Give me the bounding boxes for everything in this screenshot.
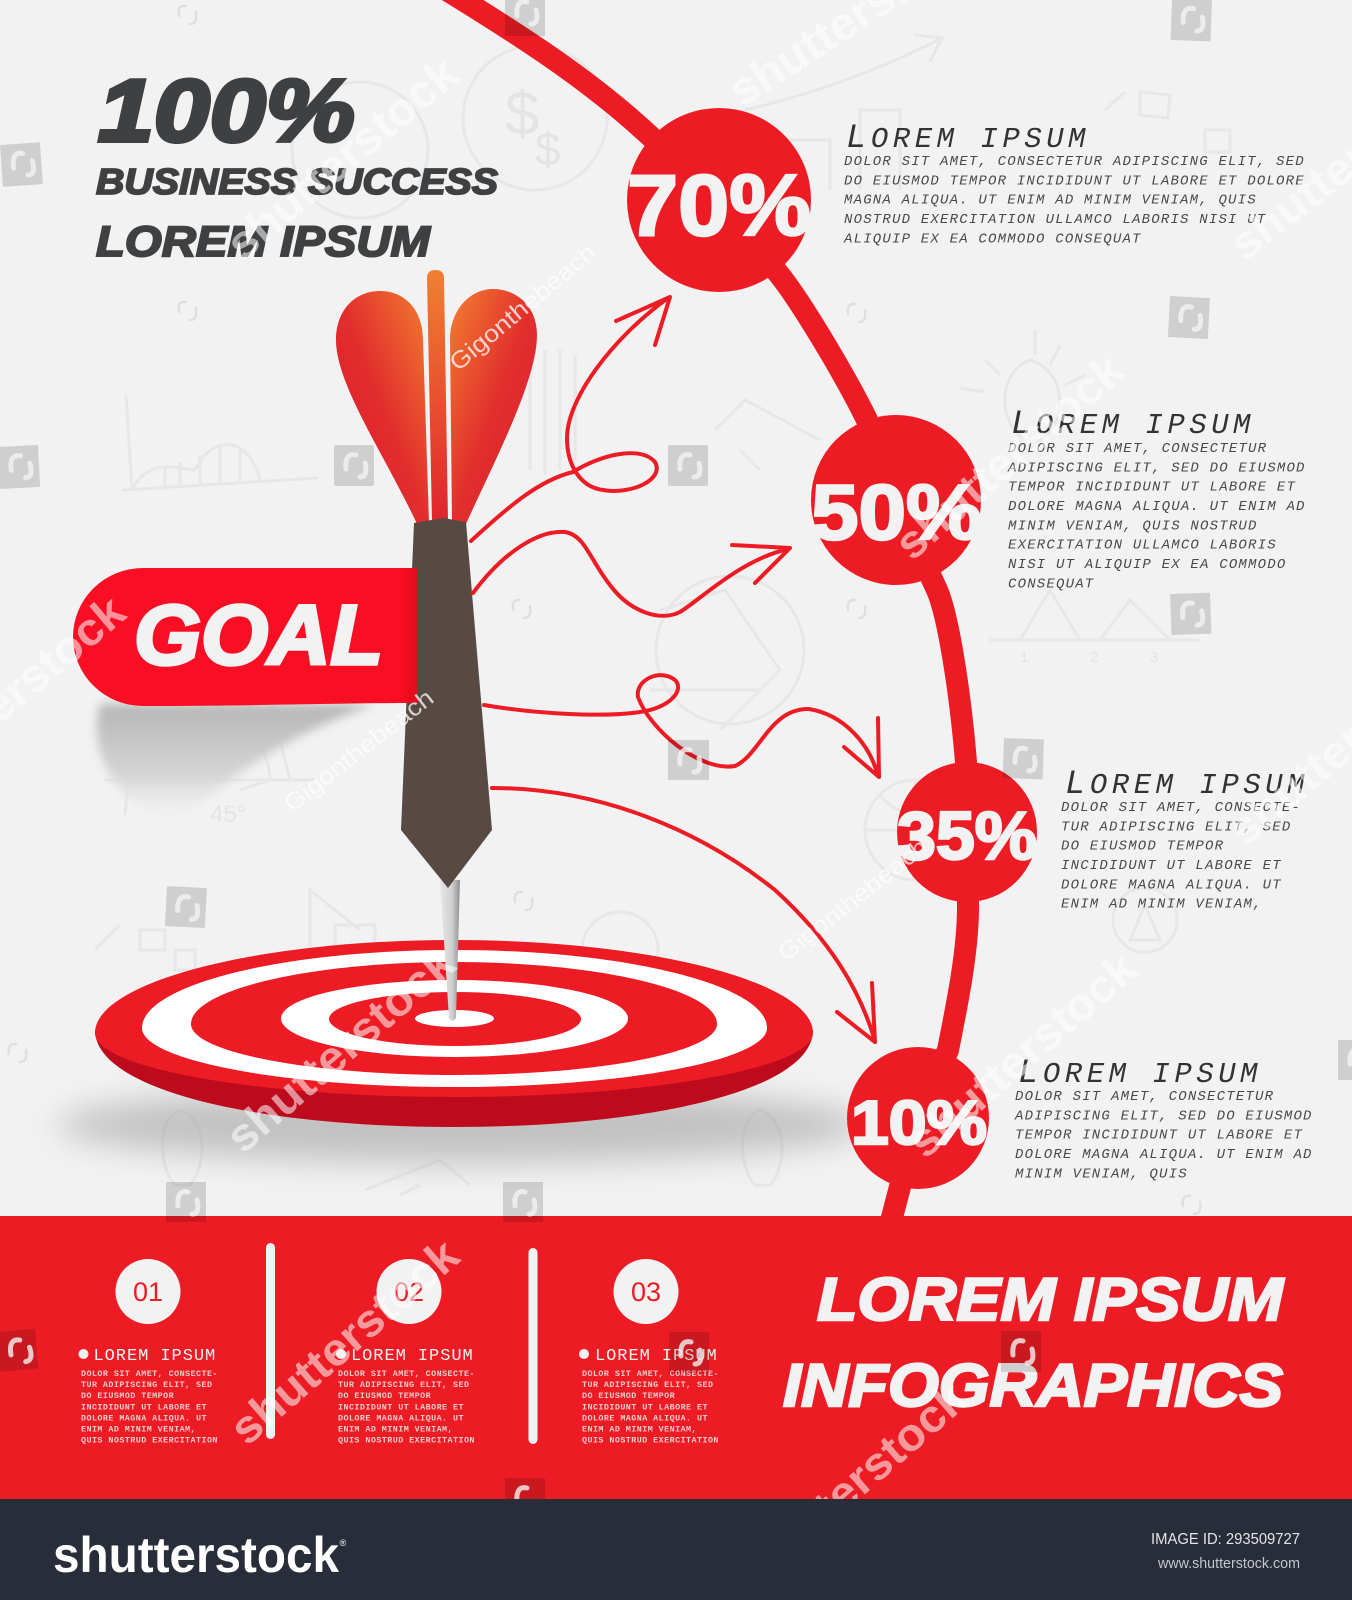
text block 10% <box>1014 1055 1322 1182</box>
column 01: DO EIUSMOD TEMPOR <box>81 1391 175 1401</box>
text block 50%: NISI UT ALIQUIP EX EA COMMODO <box>1008 557 1286 573</box>
text block 10%: DOLORE MAGNA ALIQUA. UT ENIM AD <box>1015 1147 1313 1163</box>
text block 10%: MINIM VENIAM, QUIS <box>1015 1166 1188 1182</box>
column 02: LOREM IPSUM <box>351 1347 474 1366</box>
column 02: QUIS NOSTRUD EXERCITATION <box>338 1436 475 1446</box>
band heading <box>783 1266 1285 1419</box>
bottom band <box>0 1216 1352 1499</box>
band heading: INFOGRAPHICS <box>783 1352 1283 1419</box>
text block 10%: ADIPISCING ELIT, SED DO EIUSMOD <box>1014 1108 1313 1124</box>
dart needle <box>440 880 460 1020</box>
text block 35%: DOLORE MAGNA ALIQUA. UT <box>1061 877 1282 893</box>
watermarks: shutterstock <box>216 46 468 270</box>
text block 70%: LOREM IPSUM <box>846 120 1090 158</box>
text block 35% <box>1061 766 1311 913</box>
title: LOREM IPSUM <box>96 218 431 266</box>
text block 35%: DO EIUSMOD TEMPOR <box>1061 839 1224 855</box>
text block 70% <box>843 120 1314 247</box>
divider 1 <box>266 1243 275 1439</box>
column 01: DOLORE MAGNA ALIQUA. UT <box>81 1413 207 1423</box>
text block 35%: INCIDIDUNT UT LABORE ET <box>1061 858 1282 874</box>
title: 100% <box>98 61 355 160</box>
footer: www.shutterstock.com <box>1157 1555 1300 1572</box>
text block 50%: DOLOR SIT AMET, CONSECTETUR <box>1008 441 1267 457</box>
column 01: QUIS NOSTRUD EXERCITATION <box>81 1436 218 1446</box>
text block 35%: DOLOR SIT AMET, CONSECTE- <box>1061 800 1301 816</box>
column 03: ENIM AD MINIM VENIAM, <box>582 1424 697 1434</box>
column 03: DOLORE MAGNA ALIQUA. UT <box>582 1413 708 1423</box>
column 01: TUR ADIPISCING ELIT, SED <box>81 1380 212 1390</box>
text block 10%: LOREM IPSUM <box>1018 1055 1262 1093</box>
text block 35%: TUR ADIPISCING ELIT, SED <box>1061 819 1291 835</box>
doodle symbols <box>210 80 1158 828</box>
text block 50%: CONSEQUAT <box>1008 576 1094 592</box>
doodle symbols: $ <box>505 80 539 149</box>
title <box>96 61 498 266</box>
column 01: ENIM AD MINIM VENIAM, <box>81 1424 196 1434</box>
background sketch doodles <box>95 35 1230 1195</box>
band heading: LOREM IPSUM <box>817 1266 1285 1333</box>
column 02: 02 <box>394 1277 424 1307</box>
watermarks: Gigonthebeach <box>279 684 439 818</box>
text block 50%: EXERCITATION ULLAMCO LABORIS <box>1008 538 1277 554</box>
text block 50%: MINIM VENIAM, QUIS NOSTRUD <box>1008 518 1258 534</box>
step 35% <box>897 762 1037 902</box>
step 35%: 35% <box>897 798 1037 874</box>
column 02: DOLOR SIT AMET, CONSECTE- <box>338 1369 475 1379</box>
text block 70%: DOLOR SIT AMET, CONSECTETUR ADIPISCING ELIT, SED <box>844 154 1305 170</box>
step 10%: 10% <box>851 1089 987 1158</box>
doodle symbols: 2 <box>1090 649 1098 666</box>
column 03: DOLOR SIT AMET, CONSECTE- <box>582 1369 719 1379</box>
column 03: INCIDIDUNT UT LABORE ET <box>582 1402 708 1412</box>
footer image id: IMAGE ID: 293509727 <box>1151 1531 1300 1548</box>
watermarks: shutterstock <box>727 1371 977 1598</box>
doodle symbols: 45° <box>210 801 246 828</box>
arrow to 70% <box>471 297 670 541</box>
doodle symbols: 3 <box>1150 649 1158 666</box>
column 03 <box>579 1259 724 1446</box>
text block 70%: ALIQUIP EX EA COMMODO CONSEQUAT <box>843 231 1142 247</box>
doodle symbols: 1 <box>1020 649 1028 666</box>
timeline curve <box>440 0 968 1225</box>
text block 35%: ENIM AD MINIM VENIAM, <box>1061 897 1263 913</box>
arrow to 10% <box>492 788 875 1042</box>
goal banner shadow <box>97 704 375 825</box>
column 01: 01 <box>133 1277 163 1307</box>
ground shadow <box>57 1087 867 1163</box>
step 50% <box>811 415 982 585</box>
text block 70%: MAGNA ALIQUA. UT ENIM AD MINIM VENIAM, QUIS <box>844 193 1257 209</box>
text block 35%: LOREM IPSUM <box>1065 766 1309 804</box>
text block 50%: ADIPISCING ELIT, SED DO EIUSMOD <box>1007 460 1306 476</box>
column 02: INCIDIDUNT UT LABORE ET <box>338 1402 464 1412</box>
column 03: QUIS NOSTRUD EXERCITATION <box>582 1436 719 1446</box>
column 01: DOLOR SIT AMET, CONSECTE- <box>81 1369 218 1379</box>
dart <box>336 270 537 1020</box>
step 10% <box>847 1047 989 1189</box>
footer: ® <box>340 1538 347 1548</box>
watermarks: shutterstock <box>215 936 465 1163</box>
column 01: INCIDIDUNT UT LABORE ET <box>81 1402 207 1412</box>
column 02: DO EIUSMOD TEMPOR <box>338 1391 432 1401</box>
text block 70%: DO EIUSMOD TEMPOR INCIDIDUNT UT LABORE ET DOLORE <box>844 173 1305 189</box>
column 02: TUR ADIPISCING ELIT, SED <box>338 1380 469 1390</box>
column 03: DO EIUSMOD TEMPOR <box>582 1391 676 1401</box>
column 01 <box>78 1259 223 1446</box>
column 03: 03 <box>631 1277 661 1307</box>
text block 10%: TEMPOR INCIDIDUNT UT LABORE ET <box>1015 1128 1303 1144</box>
column 03: TUR ADIPISCING ELIT, SED <box>582 1380 713 1390</box>
text block 50%: TEMPOR INCIDIDUNT UT LABORE ET <box>1008 480 1296 496</box>
dart flights <box>336 291 429 526</box>
column 02: DOLORE MAGNA ALIQUA. UT <box>338 1413 464 1423</box>
text block 70%: NOSTRUD EXERCITATION ULLAMCO LABORIS NISI UT <box>844 212 1266 228</box>
text block 50%: LOREM IPSUM <box>1011 406 1255 444</box>
watermarks: shutterstock <box>219 1228 469 1455</box>
text block 10%: DOLOR SIT AMET, CONSECTETUR <box>1015 1089 1274 1105</box>
step 70%: 70% <box>627 158 811 254</box>
text block 50%: DOLORE MAGNA ALIQUA. UT ENIM AD <box>1008 499 1306 515</box>
column 01: LOREM IPSUM <box>94 1347 216 1366</box>
divider 2 <box>528 1248 538 1444</box>
column 03: LOREM IPSUM <box>595 1347 718 1366</box>
watermarks: Gigonthebeach <box>445 239 601 377</box>
arrow to 35% <box>484 675 879 777</box>
watermarks: Gigonthebeach <box>773 833 933 967</box>
watermarks: shutterstock <box>897 941 1147 1168</box>
goal banner <box>73 568 418 706</box>
column 02 <box>336 1259 480 1446</box>
dart barrel <box>401 518 492 888</box>
footer <box>0 1499 1352 1600</box>
doodle symbols: $ <box>535 123 561 175</box>
step 70% <box>627 108 811 292</box>
text block 50% <box>1007 406 1315 592</box>
title: BUSINESS SUCCESS <box>96 161 498 202</box>
step 50%: 50% <box>811 468 982 556</box>
footer logo: shutterstock <box>53 1527 339 1583</box>
arrow to 50% <box>473 532 790 616</box>
goal banner: GOAL <box>134 588 383 682</box>
watermarks: shutterstock <box>884 343 1134 570</box>
target board <box>95 940 813 1127</box>
column 02: ENIM AD MINIM VENIAM, <box>338 1424 453 1434</box>
